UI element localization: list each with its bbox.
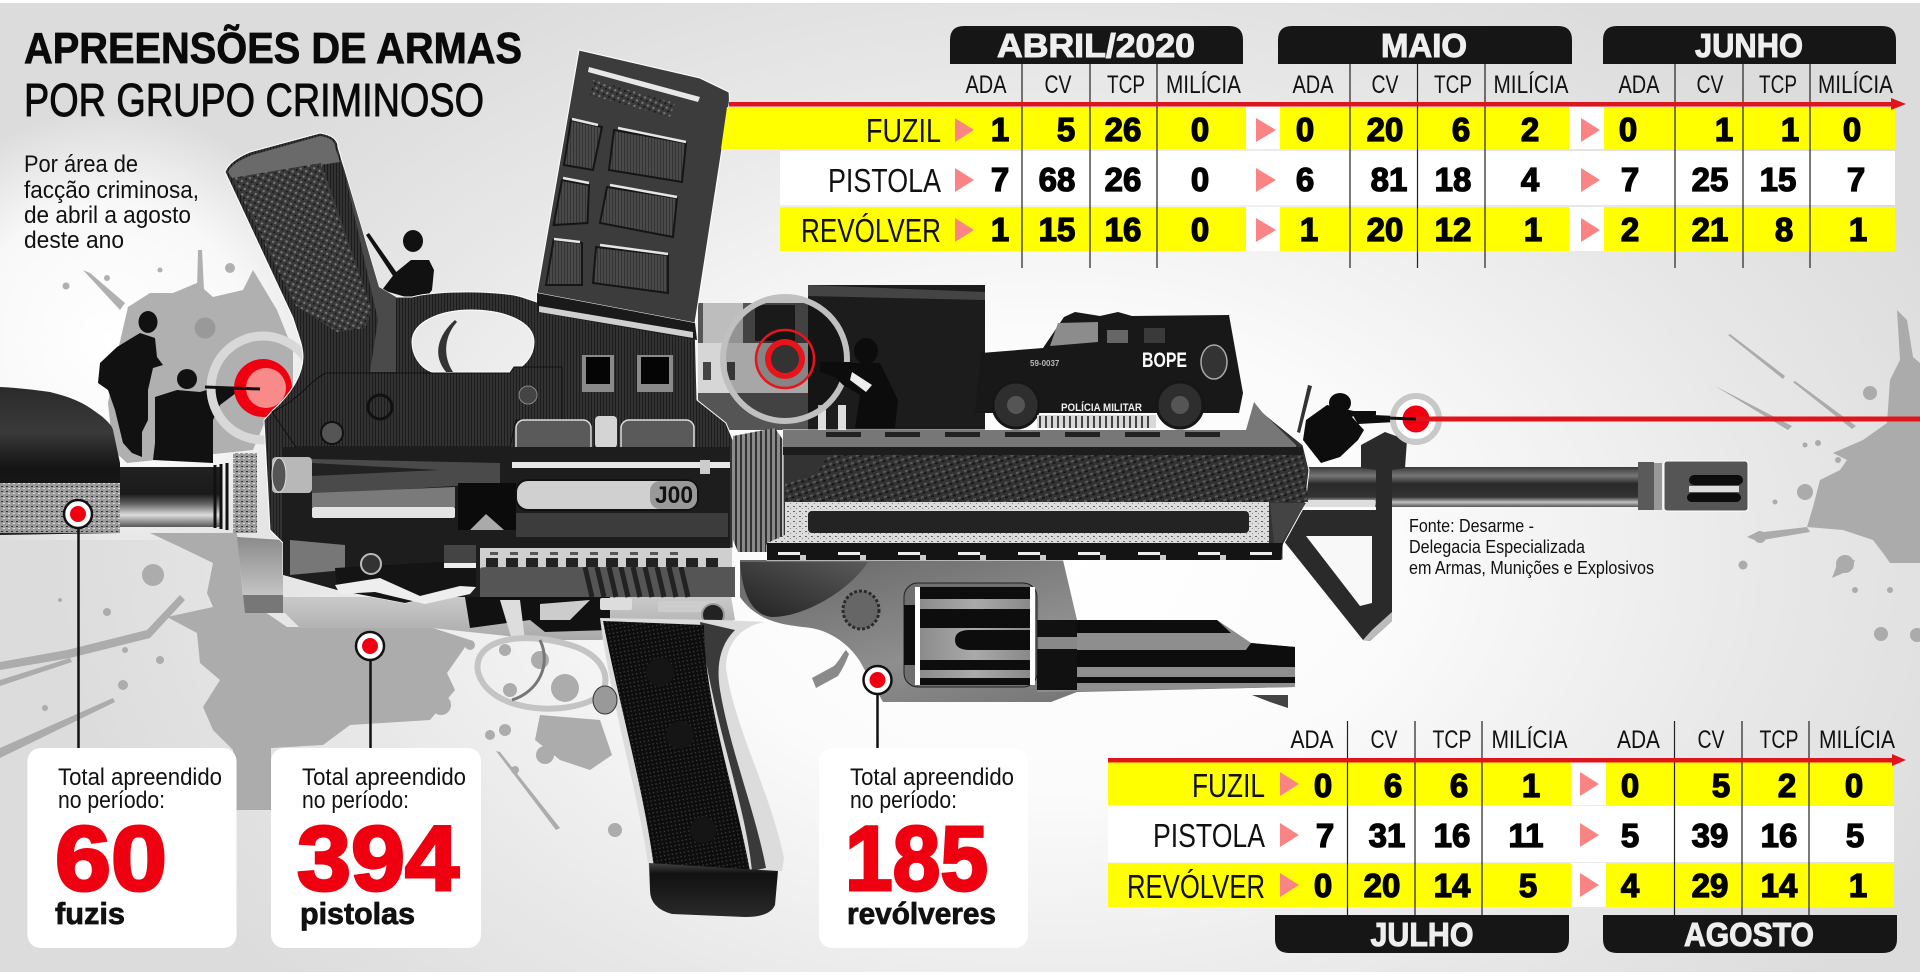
column dividers [1348,721,1809,915]
row arrows [1280,772,1599,897]
armored vehicle BOPE: BOPE [1142,349,1187,372]
values: revolver: 29 [1692,867,1728,904]
column headers: MILÍCIA [1166,70,1241,99]
rifle handguard texture [785,455,1308,502]
month header: August [1603,915,1897,953]
rifle ejection windows [582,355,673,392]
values: revolver: 14 [1761,867,1798,904]
pistol slide serrations [476,567,735,597]
card: revolveres total [819,748,1028,948]
row arrows [955,118,1600,242]
values: pistola: 39 [1692,817,1728,854]
column headers: ADA [1617,726,1660,754]
values: revolver: 8 [1775,211,1793,248]
values: fuzil: 20 [1367,111,1403,148]
pistol trigger [512,640,544,700]
marker: revolver total [864,666,892,750]
column headers: TCP [1432,726,1472,754]
row labels: PISTOLA [1153,817,1265,854]
rifle [0,50,1748,641]
values: pistola: 7 [1621,161,1639,198]
values: fuzil: 2 [1778,767,1796,804]
column headers: MILÍCIA [1818,70,1893,99]
column headers: TCP [1107,71,1145,99]
column dividers [1022,64,1810,268]
values: pistola: 26 [1105,161,1141,198]
row backgrounds [1108,762,1894,907]
values: fuzil: 5 [1057,111,1075,148]
values: fuzil: 0 [1845,767,1863,804]
rifle stock [0,387,120,535]
values: fuzil: 0 [1619,111,1637,148]
values: revolver: 1 [1849,211,1867,248]
rifle receiver bars [516,416,694,457]
values: fuzil: 26 [1105,111,1141,148]
values: pistola: 31 [1369,817,1405,854]
values: revolver: 20 [1367,211,1403,248]
month header: May: MAIO [1381,27,1467,64]
rifle flash hider [1638,461,1748,511]
values: fuzil: 1 [1715,111,1733,148]
rifle rail teeth [480,548,732,567]
revolver barrel [1037,620,1295,708]
values: fuzil: 0 [1296,111,1314,148]
row labels: FUZIL [866,112,941,149]
title [24,23,522,126]
table: April to June [721,26,1906,268]
column headers: ADA [1290,726,1334,754]
column headers: TCP [1760,726,1798,754]
revolver cylinder [904,583,1037,687]
column headers: CV [1698,726,1725,754]
month header: July [1275,915,1569,953]
month header: July: JULHO [1370,916,1474,953]
values: fuzil: 6 [1450,767,1468,804]
values: revolver: 5 [1519,867,1537,904]
source note: Fonte: Desarme - [1409,516,1534,536]
values: pistola: 15 [1760,161,1796,198]
values: revolver: 1 [1849,867,1867,904]
card: fuzis total: fuzis [55,896,125,931]
column headers: MILÍCIA [1494,70,1569,99]
column headers: ADA [1292,71,1334,99]
marker: pistol total [356,632,384,750]
title: APREENSÕES DE ARMAS [24,23,522,73]
title: POR GRUPO CRIMINOSO [24,74,484,126]
values: revolver: 0 [1314,867,1332,904]
values: pistola: 81 [1371,161,1407,198]
marker: rifle total [64,500,92,750]
card: revolveres total: no período: [850,787,957,814]
values: revolver [1314,867,1867,904]
rifle handguard star [1270,503,1306,543]
card: fuzis total: 60 [55,808,167,910]
armored vehicle BOPE: 59-0037 [1030,359,1060,368]
card: pistolas total: Total apreendido [302,764,466,791]
values: revolver: 4 [1621,867,1640,904]
values: pistola [1316,817,1864,854]
values: fuzil: 6 [1384,767,1402,804]
rifle plate lower shade [516,513,728,537]
source note: Delegacia Especializada [1409,537,1586,557]
rifle front sight [1283,432,1407,641]
values: fuzil [1314,767,1863,804]
rifle handguard slot [808,511,1249,533]
card: fuzis total [28,748,236,948]
rifle handguard bottom rail [767,543,1283,560]
card: pistolas total [271,748,481,948]
rifle stock textured lower band [0,483,120,533]
rifle bolt cylinder [272,457,500,518]
values: pistola: 11 [1509,817,1543,854]
month header: June [1603,26,1896,64]
column headers: TCP [1759,71,1797,99]
rifle magazine [537,50,729,323]
rifle delta ring [733,428,783,552]
column headers: CV [1372,71,1399,99]
row labels: REVÓLVER [1127,868,1265,905]
card: fuzis total: no período: [58,787,165,814]
pistol silver frame [237,537,735,640]
pistol safety [593,686,617,714]
values: pistola: 7 [1316,817,1334,854]
values: pistola [991,161,1865,198]
rifle upper dark band [282,447,730,597]
pistol grip panel [603,621,750,871]
rifle ring collars [215,463,227,530]
values: revolver: 12 [1435,211,1471,248]
values: revolver: 2 [1621,211,1639,248]
row labels [1127,767,1265,905]
target: left soldiers [205,336,315,440]
values: pistola: 7 [991,161,1009,198]
pistol grip screws [646,658,716,843]
row labels [801,112,941,249]
rifle handguard silver panel [767,502,1269,543]
rifle forward assist [458,483,516,530]
red timeline arrow [1108,754,1906,766]
row labels: REVÓLVER [801,212,941,249]
row labels: PISTOLA [828,162,941,199]
rifle grip side strip [343,165,396,372]
card: revolveres total: Total apreendido [850,764,1014,791]
rifle pivot pins [321,386,537,444]
ink splatter lower left [0,533,622,837]
card: pistolas total: 394 [297,808,459,910]
rifle grip texture [232,163,372,332]
pistol frame dark edge [243,595,283,613]
card: pistolas total: no período: [302,787,409,814]
values: revolver: 16 [1105,211,1141,248]
silhouette: soldier on grip [366,230,434,302]
rifle rail line [512,460,730,474]
ink splatter right [1715,310,1920,642]
values: fuzil: 6 [1452,111,1470,148]
red timeline arrow [729,98,1906,110]
rifle receiver plate [516,480,698,510]
month header: April [950,26,1243,64]
values: fuzil: 0 [1843,111,1861,148]
values: fuzil: 2 [1521,111,1539,148]
armored vehicle BOPE [975,312,1243,428]
values: revolver: 20 [1364,867,1400,904]
values: fuzil [991,111,1861,148]
rifle handguard top rail [783,402,1296,447]
month header: May [1278,26,1572,64]
values: pistola: 25 [1692,161,1728,198]
month header: August: AGOSTO [1684,916,1814,953]
month header: June: JUNHO [1695,27,1803,64]
paper held by soldier [850,372,872,392]
values: fuzil: 5 [1712,767,1730,804]
card: revolveres total: revólveres [847,896,996,931]
subtitle [24,151,199,254]
column headers: CV [1696,71,1724,99]
silhouette: sniper [1297,385,1416,463]
revolver frame [740,560,1295,702]
revolver logo [843,591,879,629]
rifle buffer tube [120,467,220,527]
column headers: ADA [1618,71,1660,99]
silhouette: standing soldier [98,311,163,457]
revolver dark grip [740,562,868,617]
column headers: CV [1370,726,1398,754]
rifle rear block [233,453,257,533]
armored vehicle BOPE: POLÍCIA MILITAR [1061,401,1142,414]
rifle barrel [1300,467,1642,507]
values: revolver [991,211,1867,248]
values: revolver: 15 [1039,211,1075,248]
pistol [237,537,784,917]
rifle handguard [767,402,1309,560]
column headers: MILÍCIA [1819,725,1895,754]
column headers: MILÍCIA [1492,725,1568,754]
target: sniper with laser line [1385,396,1920,442]
values: pistola: 68 [1039,161,1075,198]
values: pistola: 6 [1296,161,1314,198]
values: pistola: 5 [1621,817,1639,854]
values: revolver: 14 [1434,867,1471,904]
values: pistola: 4 [1521,161,1540,198]
values: pistola: 18 [1435,161,1471,198]
values: revolver: 21 [1692,211,1728,248]
row backgrounds [721,107,1895,251]
pistol magazine base [649,863,778,917]
rifle lower receiver and grip [225,133,733,603]
values: pistola: 16 [1434,817,1470,854]
subtitle: de abril a agosto [24,202,191,229]
column headers: ADA [966,71,1007,99]
table: July and August [1108,721,1906,953]
rifle receiver plate: J00 [655,482,693,509]
revolver [740,560,1295,708]
month header: April: ABRIL/2020 [997,27,1195,64]
column headers: CV [1044,71,1072,99]
revolver trigger [812,650,849,688]
favela buildings [698,285,985,430]
source note [1409,516,1654,578]
subtitle: Por área de [24,151,138,178]
pistol grip silver edges [600,618,784,871]
source note: em Armas, Munições e Explosivos [1409,558,1654,578]
values: pistola: 16 [1761,817,1797,854]
values: revolver: 1 [991,211,1009,248]
values: pistola: 0 [1191,161,1209,198]
subtitle: deste ano [24,227,124,254]
card: revolveres total: 185 [845,808,988,910]
rifle stipple lower body line [272,367,562,447]
values: revolver: 0 [1191,211,1209,248]
values: pistola: 5 [1846,817,1864,854]
values: pistola: 7 [1847,161,1865,198]
values: fuzil: 0 [1191,111,1209,148]
pistol controls [465,597,724,640]
subtitle: facção criminosa, [24,177,199,204]
rifle selector assembly [290,540,476,604]
values: fuzil: 0 [1621,767,1639,804]
values: fuzil: 0 [1314,767,1332,804]
rifle magazine well [537,293,697,340]
column headers [1290,725,1895,754]
column headers [966,70,1893,99]
card: fuzis total: Total apreendido [58,764,222,791]
rifle grip upper cap [228,136,340,178]
row labels: FUZIL [1192,767,1265,804]
values: fuzil: 1 [1781,111,1799,148]
values: fuzil: 1 [1522,767,1540,804]
values: revolver: 1 [1300,211,1318,248]
silhouette: kneeling soldier [153,369,260,463]
target: buildings [723,297,847,421]
pistol grip dark band [700,622,766,871]
column headers: TCP [1434,71,1472,99]
pistol trigger guard [477,638,605,709]
card: pistolas total: pistolas [300,896,415,931]
rifle trigger [438,320,457,372]
values: fuzil: 1 [991,111,1009,148]
silhouette: soldier at buildings [820,338,898,428]
values: revolver: 1 [1524,211,1542,248]
ink splatter upper left [62,250,293,463]
